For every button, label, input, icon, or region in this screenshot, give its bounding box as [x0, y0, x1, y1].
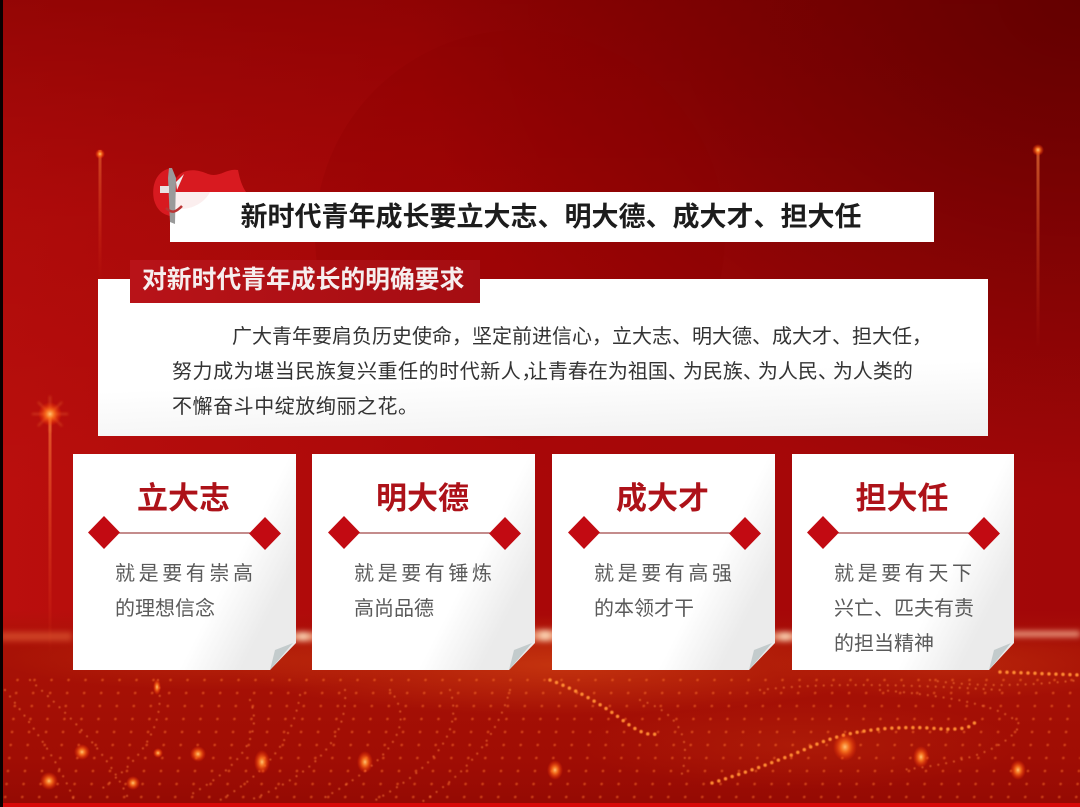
- heading: 立大志: [137, 481, 230, 516]
- heading: 成大才: [616, 481, 709, 516]
- icon: huabiao column with red flag: [153, 168, 246, 224]
- horizon beams: [0, 630, 1080, 641]
- paragraph: [172, 326, 932, 418]
- divider with diamonds: [88, 516, 281, 550]
- paragraph: 不懈奋斗中绽放绚丽之花。: [172, 396, 419, 418]
- star lights: [32, 144, 1044, 790]
- card: 担大任: [792, 454, 1014, 670]
- card: 成大才: [552, 454, 775, 670]
- description: 就是要有锤炼: [354, 563, 496, 585]
- divider with diamonds: [568, 516, 761, 550]
- description: 的理想信念: [115, 598, 215, 620]
- card: 立大志: [73, 454, 296, 670]
- divider with diamonds: [328, 516, 521, 550]
- title banner: [170, 192, 934, 242]
- description: 就是要有高强: [594, 563, 736, 585]
- panel: requirement text: [98, 279, 988, 436]
- description: [594, 563, 736, 620]
- description: 就是要有崇高: [115, 563, 257, 585]
- description: 的本领才干: [594, 598, 694, 620]
- card: 明大德: [312, 454, 535, 670]
- section tag: 对新时代青年成长的明确要求: [142, 267, 464, 294]
- paragraph: 广大青年要肩负历史使命，坚定前进信心，立大志、明大德、成大才、担大任，: [232, 326, 932, 348]
- description: 兴亡、匹夫有责: [834, 598, 974, 620]
- heading: 明大德: [376, 481, 469, 516]
- paragraph: 努力成为堪当民族复兴重任的时代新人，让青春在为祖国、为民族、为人民、为人类的: [172, 361, 913, 383]
- description: 高尚品德: [354, 598, 434, 620]
- description: [354, 563, 496, 620]
- title text: 新时代青年成长要立大志、明大德、成大才、担大任: [240, 202, 862, 232]
- divider with diamonds: [807, 516, 1000, 550]
- section tag: [130, 260, 480, 303]
- description: 就是要有天下: [834, 563, 976, 585]
- description: [115, 563, 257, 620]
- description: [834, 563, 976, 655]
- heading: 担大任: [856, 481, 948, 516]
- description: 的担当精神: [834, 633, 934, 655]
